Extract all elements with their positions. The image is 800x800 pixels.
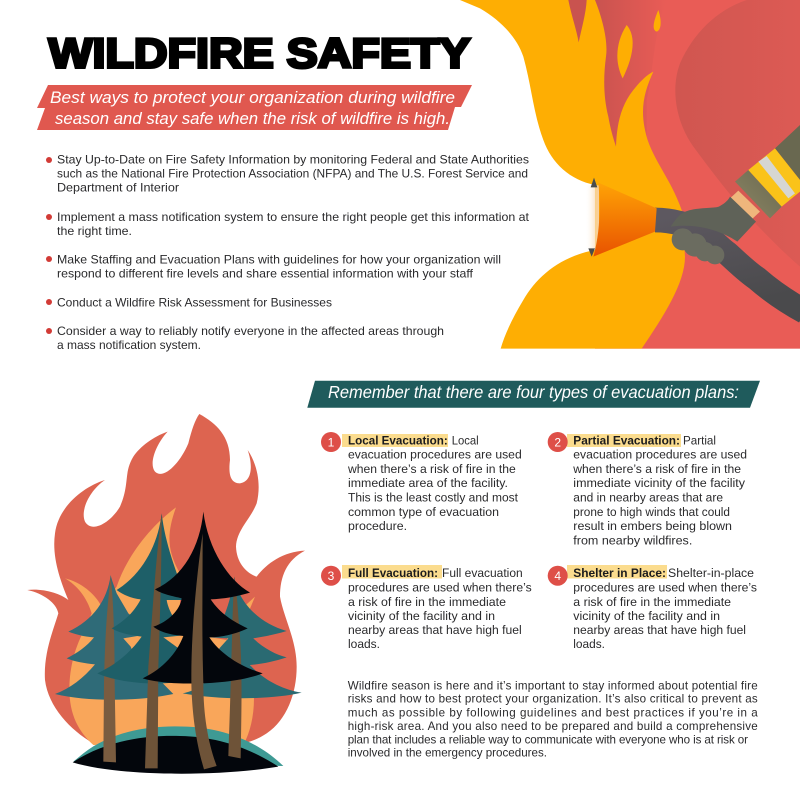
bullet 5: Consider a way to reliably notify everyone in the affected areas through xyxy=(57,324,444,338)
banner shape xyxy=(37,85,472,130)
glove fingers xyxy=(672,228,724,264)
card 3: full evacuation: 3 xyxy=(328,569,335,583)
closing paragraph: risks and how to best protect your organization. It’s also critical to prevent as xyxy=(348,693,758,706)
yellow flame xyxy=(460,0,685,349)
middle pine foliage xyxy=(97,513,190,683)
card 2: partial evacuation xyxy=(548,432,747,548)
bullet 1: Stay Up-to-Date on Fire Safety Information by monitoring Federal and State Authorities xyxy=(57,152,529,166)
card 3: full evacuation: Full Evacuation: xyxy=(348,566,438,580)
upper sleeve xyxy=(775,125,800,180)
silver stripe xyxy=(758,156,795,198)
card 1: local evacuation: evacuation procedures are used xyxy=(348,448,522,462)
card 2: partial evacuation: from nearby wildfires. xyxy=(573,534,692,548)
card 1: local evacuation: common type of evacuation xyxy=(348,505,499,519)
closing paragraph: plan that includes a reliable way to communicate with everyone who is at risk or xyxy=(348,733,748,746)
evacuation plans banner: Remember that there are four types of evacuation plans: xyxy=(328,382,739,402)
card 4: shelter in place: loads. xyxy=(573,637,605,651)
closing paragraph: high-risk area. And you also need to be prepared and build a comprehensive xyxy=(348,720,758,733)
card 3: full evacuation: nearby areas that have high fuel xyxy=(348,623,522,637)
right pine foliage xyxy=(183,577,302,698)
hill xyxy=(73,736,278,774)
nozzle tips xyxy=(588,178,597,257)
firefighter cuff xyxy=(735,170,782,218)
illustration: firefighter hose and flames xyxy=(460,0,800,349)
card 4: shelter in place: procedures are used when there’s xyxy=(573,581,757,595)
bullet 2: the right time. xyxy=(57,224,132,238)
card 2: partial evacuation: 2 xyxy=(554,436,561,450)
dark red blob xyxy=(675,0,800,267)
black pine foliage xyxy=(143,512,263,684)
card 1: local evacuation: Local xyxy=(452,433,479,447)
glove palm xyxy=(671,197,756,242)
card 1: local evacuation: when there’s a risk of fire in the xyxy=(347,462,516,476)
banner text: season and stay safe when the risk of wildfire is high. xyxy=(55,110,450,128)
dark flame tongue xyxy=(568,0,587,42)
card 4: shelter in place: nearby areas that have high fuel xyxy=(573,623,746,637)
middle pine trunk xyxy=(145,513,162,768)
closing paragraph: involved in the emergency procedures. xyxy=(348,747,547,760)
bullet 3 xyxy=(46,252,501,280)
red flame xyxy=(27,414,305,743)
card 2: partial evacuation: Partial xyxy=(683,433,716,447)
card 1: local evacuation: This is the least costly and most xyxy=(348,491,519,505)
bullet 5 xyxy=(46,324,444,352)
bullet 1: such as the National Fire Protection Association (NFPA) and The U.S. Forest Service and xyxy=(57,166,528,180)
card 4: shelter in place: vicinity of the facility and in xyxy=(573,609,720,623)
card 3: full evacuation: a risk of fire in the immediate xyxy=(348,595,506,609)
card 3: full evacuation: procedures are used when there’s xyxy=(348,581,532,595)
closing paragraph: much as possible by following guidelines and best practices if you’re in a xyxy=(348,707,758,720)
bullet 1: Department of Interior xyxy=(57,181,179,195)
subtitle banner xyxy=(37,85,472,130)
closing paragraph xyxy=(348,679,758,760)
nozzle cone xyxy=(593,183,657,257)
card 2: partial evacuation: prone to high winds that could xyxy=(573,505,730,519)
card 4: shelter in place: a risk of fire in the immediate xyxy=(573,595,731,609)
card 4: shelter in place: 4 xyxy=(554,569,561,583)
card 2: partial evacuation: immediate vicinity of the facility xyxy=(573,476,746,490)
card 1: local evacuation: procedure. xyxy=(348,519,407,533)
illustration: burning pine trees xyxy=(27,414,305,774)
card 1: local evacuation: 1 xyxy=(328,436,335,450)
right pine trunk xyxy=(228,577,242,758)
hose xyxy=(655,220,800,312)
water glow at nozzle xyxy=(585,185,599,249)
closing paragraph: Wildfire season is here and it’s important to stay informed about potential fire xyxy=(348,679,758,692)
card 1: local evacuation xyxy=(321,432,522,533)
card 2: partial evacuation: result in embers being blown xyxy=(573,519,732,533)
reflective stripes xyxy=(748,148,800,207)
banner text: Best ways to protect your organization during wildfire xyxy=(50,89,455,107)
hill teal rim xyxy=(73,726,283,766)
bullet 3: respond to different fire levels and share essential information with your staff xyxy=(57,266,474,280)
card 4: shelter in place xyxy=(548,565,757,651)
card 2: partial evacuation: when there’s a risk of fire in the xyxy=(572,462,741,476)
card 4: shelter in place: Shelter in Place: xyxy=(573,566,666,580)
bullet 5: a mass notification system. xyxy=(57,338,201,352)
bullet 2: Implement a mass notification system to ensure the right people get this information at xyxy=(57,210,530,224)
flying ember large xyxy=(617,25,633,78)
bullet 1 xyxy=(46,152,529,195)
bullet list xyxy=(46,152,530,352)
card 3: full evacuation: vicinity of the facility and in xyxy=(348,609,495,623)
orange inner flame xyxy=(65,507,255,745)
card 2: partial evacuation: evacuation procedures are used xyxy=(573,448,747,462)
card 3: full evacuation: Full evacuation xyxy=(442,566,523,580)
banner text xyxy=(50,89,455,128)
wrist xyxy=(730,191,760,219)
card 2: partial evacuation: Partial Evacuation: xyxy=(573,433,680,447)
flying ember small xyxy=(654,10,661,32)
left pine trunk xyxy=(103,577,116,762)
card 3: full evacuation xyxy=(321,565,532,651)
card 2: partial evacuation: and in nearby areas that are xyxy=(573,491,723,505)
card 1: local evacuation: Local Evacuation: xyxy=(348,433,448,447)
title: WILDFIRE SAFETY xyxy=(48,30,470,76)
dark red flame band xyxy=(595,0,667,157)
left pine foliage xyxy=(55,575,173,700)
black pine trunk xyxy=(191,533,217,769)
card 4: shelter in place: Shelter-in-place xyxy=(668,566,754,580)
bullet 3: Make Staffing and Evacuation Plans with guidelines for how your organization will xyxy=(57,252,501,266)
bullet 4: Conduct a Wildfire Risk Assessment for Businesses xyxy=(57,296,332,310)
card 1: local evacuation: immediate area of the facility. xyxy=(348,476,508,490)
card 3: full evacuation: loads. xyxy=(348,637,380,651)
bullet 2 xyxy=(46,210,530,238)
red flame background xyxy=(595,0,800,349)
